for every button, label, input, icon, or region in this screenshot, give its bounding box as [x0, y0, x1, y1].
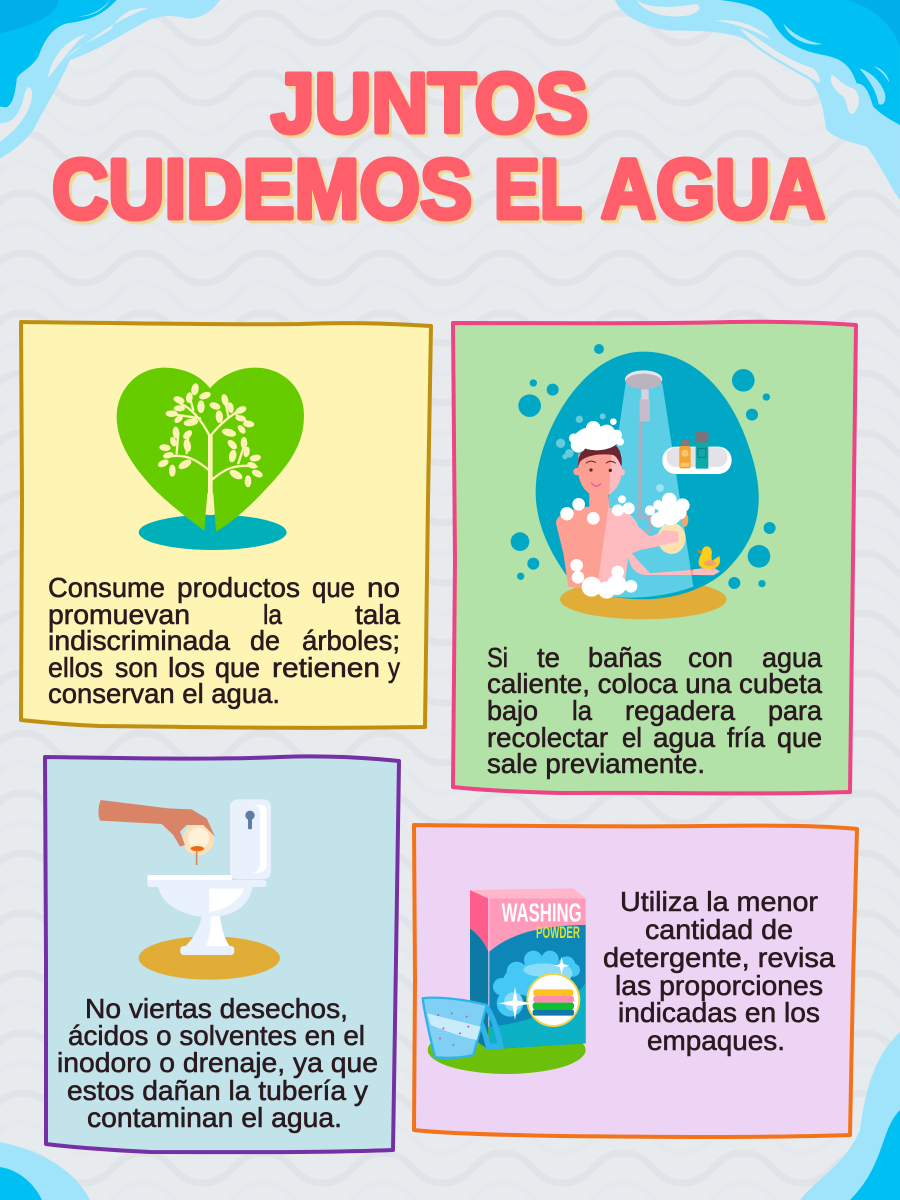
text: trees: productos: [177, 572, 300, 603]
panel background: green: [453, 322, 856, 793]
text: detergent: cantidad de: [645, 914, 793, 945]
text: shower: que: [777, 722, 822, 753]
text: detergent: Utiliza la menor: [620, 886, 818, 917]
text: trees: tala: [355, 599, 400, 630]
text: trees: que: [312, 572, 355, 603]
title: AGUA: [601, 142, 825, 236]
title: JUNTOS: [274, 59, 591, 153]
text: shower: recolectar: [487, 722, 608, 753]
text: detergent: detergente, revisa: [603, 942, 835, 973]
text: shower: agua: [762, 642, 822, 673]
title: EL: [497, 145, 585, 239]
text: shower: [487, 642, 822, 779]
text: detergent: [603, 886, 835, 1056]
panel background: yellow: [21, 322, 431, 728]
text: toilet: ácidos o solventes en el: [68, 1020, 365, 1051]
title: CUIDEMOS: [55, 145, 475, 239]
text: shower: Si: [487, 642, 508, 673]
title: JUNTOS: [271, 56, 588, 150]
water splash: top left corner: [0, 0, 220, 158]
text: shower: bañas: [588, 642, 662, 673]
text: shower: fría: [727, 722, 765, 753]
panel: toilet: [45, 756, 399, 1152]
icon: heart tree: [117, 368, 304, 550]
text: trees: promuevan: [48, 599, 190, 630]
text: shower: regadera: [625, 695, 735, 726]
text: toilet: estos dañan la tubería y: [67, 1075, 368, 1106]
text: toilet: contaminan el agua.: [87, 1102, 342, 1133]
text: detergent: empaques.: [647, 1025, 785, 1056]
text: trees: y: [388, 652, 400, 683]
panel background: blue: [45, 756, 399, 1152]
text: shower: agua: [653, 722, 715, 753]
title: CUIDEMOS: [52, 142, 472, 236]
water splash: top right corner: [615, 0, 900, 200]
text: shower: bajo: [487, 695, 538, 726]
text: toilet: No viertas desechos,: [85, 993, 348, 1024]
text: trees: no: [367, 572, 400, 603]
text: trees: la: [263, 599, 282, 630]
text: trees: conservan el agua.: [48, 678, 280, 709]
text: trees: que: [215, 652, 260, 683]
panel: trees: [21, 322, 431, 728]
water splash: bottom right corner: [800, 1032, 900, 1200]
icon: washing powder box and cup: [423, 888, 586, 1074]
text: trees: [48, 572, 400, 709]
text: shower: el: [622, 722, 642, 753]
text: trees: indiscriminada: [48, 625, 230, 656]
text: detergent: las proporciones: [615, 970, 823, 1001]
text: trees: Consume: [48, 572, 165, 603]
title: AGUA: [604, 145, 828, 239]
icon: hand pouring into toilet: [98, 799, 280, 980]
title: [52, 56, 828, 239]
panel: detergent: [414, 825, 857, 1137]
text: trees: de: [250, 625, 280, 656]
text: shower: para: [768, 695, 822, 726]
panel: shower: [453, 322, 856, 793]
text: shower: con: [688, 642, 733, 673]
text: trees: retienen: [272, 652, 380, 683]
icon: washing powder box and cup: WASHING: [502, 898, 582, 928]
text: shower: la: [572, 695, 592, 726]
text: toilet: [57, 993, 378, 1133]
text: shower: te: [537, 642, 560, 673]
panel background: purple: [414, 825, 857, 1137]
text: shower: sale previamente.: [487, 748, 705, 779]
text: trees: los: [168, 652, 205, 683]
title: EL: [494, 142, 582, 236]
text: trees: ellos: [48, 652, 103, 683]
text: detergent: indicadas en los: [618, 997, 820, 1028]
icon: washing powder box and cup: POWDER: [536, 923, 580, 942]
water splash: bottom left corner: [0, 1142, 90, 1200]
icon: person showering: [511, 344, 776, 619]
text: trees: árboles;: [302, 625, 400, 656]
text: trees: son: [115, 652, 158, 683]
text: shower: caliente, coloca una cubeta: [487, 668, 822, 699]
text: toilet: inodoro o drenaje, ya que: [57, 1047, 378, 1078]
